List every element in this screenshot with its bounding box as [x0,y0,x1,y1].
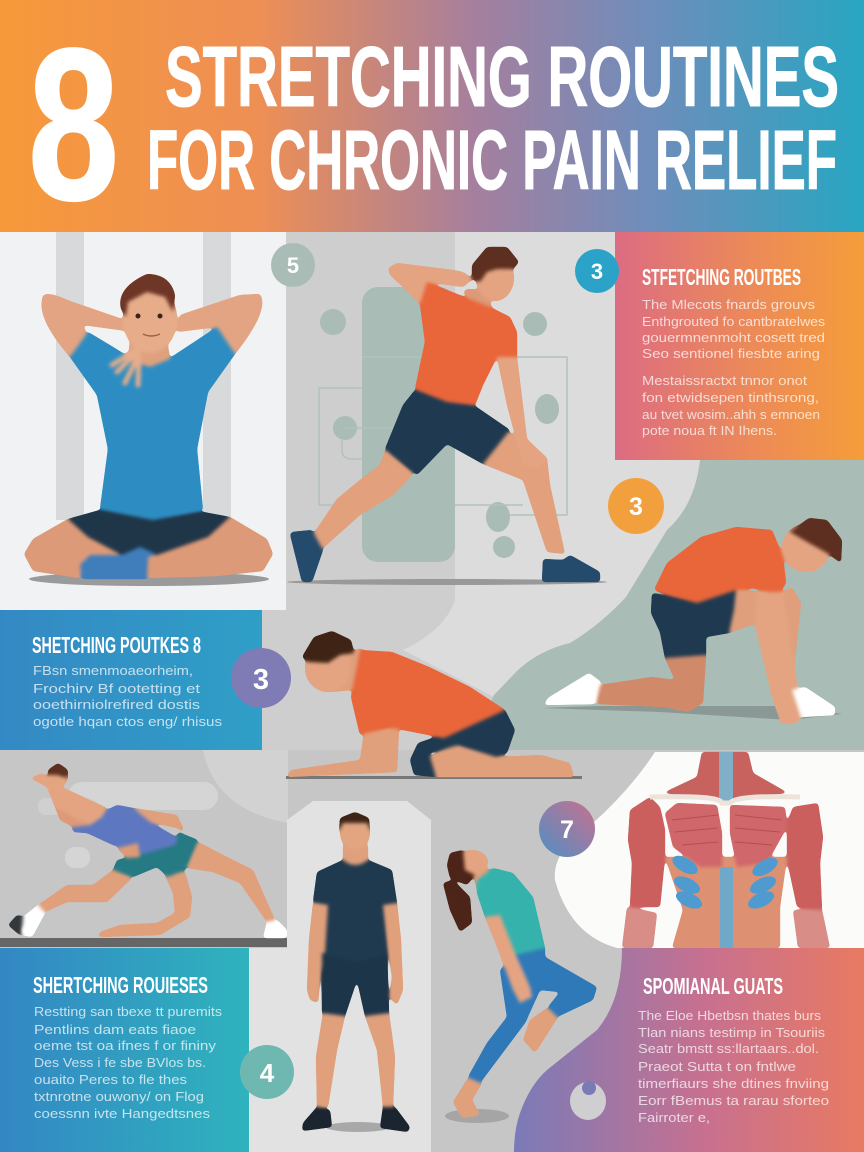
panel body text: The Eloe Hbetbsn thates burs [638,1008,822,1023]
panel body text: coessnn ivte Hangedtsnes [34,1106,211,1121]
panel body text: pote noua ft IN Ihens. [642,423,777,438]
face: seated man [136,314,162,336]
panel body text [34,1004,223,1121]
panel body text: Fairroter e, [638,1110,710,1125]
panel body text: ogotle hqan ctos eng/ rhisus [33,714,223,729]
badge 4: 4 [260,1058,275,1088]
panel heading: SHERTCHING ROUIESES [33,972,208,998]
panel body text: The Mlecots fnards grouvs [642,297,816,312]
light centre column [249,801,431,1152]
panel body text: Enthgrouted fo cantbratelwes [642,314,826,329]
panel body text [33,663,223,729]
figure: standing man [302,812,410,1132]
panel body text: fon etwidsepen tinthsrong, [642,390,819,405]
panel body text: Eorr fBemus ta rarau sforteo [638,1093,829,1108]
badge 3 purple: 3 [253,664,269,696]
panel heading: SHETCHING POUTKES 8 [32,632,201,658]
badge 3 teal: 3 [591,259,603,284]
page background [0,232,864,1152]
panel body text: Praeot Sutta t on fntlwe [638,1059,796,1074]
panel body text: Seatr bmstt ss:llartaars..dol. [638,1041,819,1056]
badge 3 orange [608,478,664,534]
decorative sage blob, right [470,460,864,750]
shoe back [290,530,323,582]
badge 3 orange: 3 [629,493,643,521]
figure: woman bending back [443,850,597,1123]
panel heading: SPOMIANAL GUATS [643,973,783,999]
badge 3 teal [575,249,619,293]
badge 7 [539,801,595,857]
panel body text: Mestaissractxt tnnor onot [642,373,807,388]
panel body text: Des Vess i fe sbe BVlos bs. [34,1055,206,1070]
muscles [622,752,830,948]
sock left [22,905,45,937]
figure: child's pose crawl [286,631,582,779]
panel: mid-left text [0,610,262,750]
panel body text: Frochirv Bf ootetting et [33,681,200,696]
panel: muscle illustration [555,752,864,948]
panel: bottom-left text [0,948,249,1152]
shoe right [263,920,287,938]
panel body text [638,1008,829,1125]
shoes [302,1107,410,1132]
badge 4 [240,1045,294,1099]
shoe left [8,915,26,937]
panel body text: Tlan nians testimp in Tsouriis [638,1025,826,1040]
panel body text: timerfiaurs she dtines fnviing [638,1076,829,1091]
shoe front [542,555,600,582]
panel body text: Seo sentionel fiesbte aring [642,346,820,361]
panel: top-right text [615,232,864,460]
panel body text: oeme tst oa ifnes f or fininy [34,1038,217,1053]
decorative background panel: sage column and circles [319,287,567,562]
panel body text: txtnrotne ouwony/ on Flog [34,1089,204,1104]
sock front [792,687,835,717]
panel body text: FBsn smenmoaeorheim, [33,663,193,678]
drop icon [570,1081,606,1120]
panel body text: gouermnenmoht cosett tred [642,330,825,345]
figure: seated man [24,274,273,579]
panel: seated neck stretch [0,232,286,610]
figure: reaching lunge [0,763,288,947]
big number 8: 8 [28,3,119,245]
sock back [544,673,601,705]
badge 5: 5 [287,253,299,278]
figure: standing lunge with orange shirt [287,247,607,585]
panel body text: ouaito Peres to fle thes [34,1072,188,1087]
panel body text: Restting san tbexe tt puremits [34,1004,223,1019]
panel body text: au tvet wosim..ahh s emnoen [642,407,820,422]
figure: kneeling forward fold [541,518,842,723]
badge 7: 7 [560,816,574,844]
panel body text [642,297,826,438]
badge 5 [271,243,315,287]
header band [0,0,864,245]
badge 3 purple [231,648,291,708]
panel body text: Pentlins dam eats fiaoe [34,1022,196,1037]
panel: bottom-right text [514,948,864,1152]
panel body text: ooethirniolrefired dostis [33,697,201,712]
